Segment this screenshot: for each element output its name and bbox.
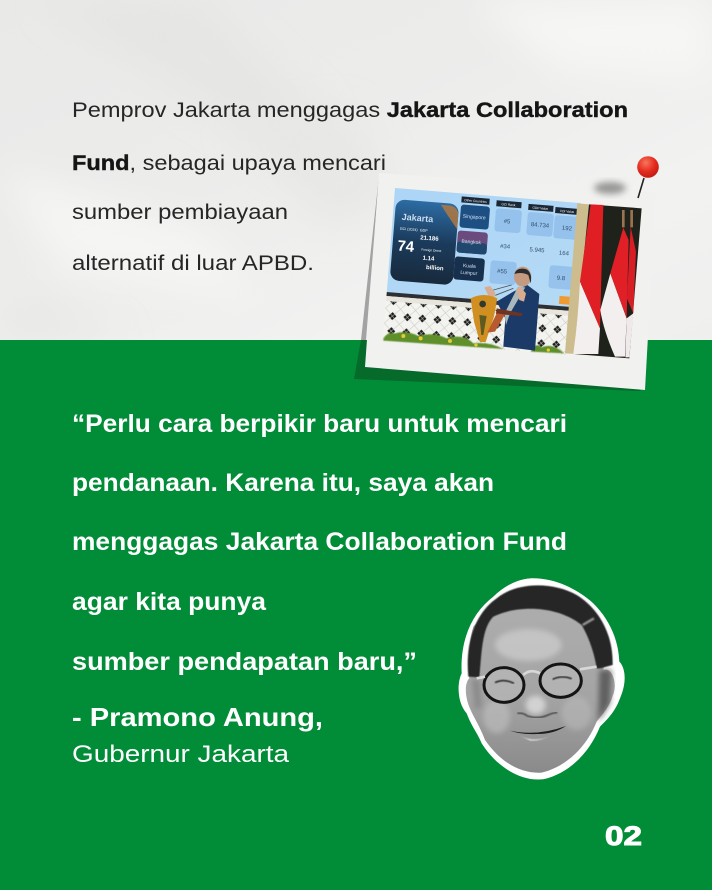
plants xyxy=(383,332,503,349)
Jakarta card: billion xyxy=(426,265,444,272)
Jakarta card xyxy=(390,199,459,285)
Jakarta card: GCI (2024) xyxy=(400,227,418,232)
city tiles: Bangkok xyxy=(461,239,482,246)
city tiles: Kuala xyxy=(463,263,476,270)
quote: sumber pendapatan baru,” xyxy=(72,648,417,676)
portrait sticker xyxy=(459,578,625,780)
intro text: Pemprov Jakarta menggagas Jakarta Collaboration xyxy=(72,99,628,122)
wall pillar xyxy=(565,203,589,354)
speaker xyxy=(484,267,539,351)
flags xyxy=(573,204,642,358)
face xyxy=(466,606,615,773)
green lower panel xyxy=(0,340,712,890)
Jakarta card: GDP xyxy=(420,228,428,233)
data cells xyxy=(489,208,581,290)
glasses xyxy=(484,664,581,702)
cheek shading xyxy=(483,700,510,733)
Jakarta card: 74 xyxy=(397,238,415,256)
lectern xyxy=(471,295,522,342)
intro text: Fund , sebagai upaya mencari xyxy=(72,152,386,175)
intro text: sumber pembiayaan xyxy=(72,201,288,224)
nose xyxy=(526,696,546,714)
column headers: FDI Value xyxy=(560,209,575,214)
intro text xyxy=(72,99,628,275)
data values: 192 xyxy=(562,226,573,233)
polaroid photo xyxy=(354,173,656,391)
attribution: - Pramono Anung, xyxy=(72,702,323,732)
data values: #5 xyxy=(503,219,511,226)
screen ledge xyxy=(386,292,573,311)
page number: 02 xyxy=(605,821,642,851)
photo foreground xyxy=(383,203,642,358)
column headers: GDP Value xyxy=(532,206,549,211)
attribution xyxy=(72,702,323,768)
Jakarta card: Foreign Direct xyxy=(421,248,442,253)
smile xyxy=(510,726,566,734)
data values: #55 xyxy=(497,269,508,276)
quote: agar kita punya xyxy=(72,588,267,616)
data values: 164 xyxy=(559,251,570,257)
lattice wall xyxy=(383,301,576,355)
Jakarta card: 1.14 xyxy=(422,256,435,263)
hair xyxy=(468,585,613,677)
map pin xyxy=(594,156,659,198)
intro text: alternatif di luar APBD. xyxy=(72,252,314,275)
city tiles: Lumpur xyxy=(460,270,478,277)
quote: menggagas Jakarta Collaboration Fund xyxy=(72,528,567,556)
Jakarta card: 21.186 xyxy=(420,235,439,243)
data values xyxy=(497,219,573,283)
polaroid shadow xyxy=(361,176,379,340)
forehead highlight xyxy=(495,629,562,661)
ear shadow xyxy=(598,670,612,722)
column headers xyxy=(461,196,581,215)
data values: 84.734 xyxy=(531,222,550,230)
quote xyxy=(72,410,567,676)
data values: #34 xyxy=(500,244,511,251)
attribution: Gubernur Jakarta xyxy=(72,741,290,768)
presentation screen xyxy=(387,188,582,307)
city tiles: Singapore xyxy=(463,214,486,221)
eyes xyxy=(495,677,572,683)
quote: pendanaan. Karena itu, saya akan xyxy=(72,469,494,497)
city tiles xyxy=(453,204,490,282)
Jakarta card: Jakarta xyxy=(401,212,435,224)
quote: “Perlu cara berpikir baru untuk mencari xyxy=(72,410,567,438)
photo xyxy=(383,188,642,360)
data values: 9.8 xyxy=(557,276,566,282)
paper background xyxy=(0,0,712,340)
polaroid frame xyxy=(365,173,656,390)
column headers: GCI Rank xyxy=(501,202,516,207)
column headers: Other Countries xyxy=(464,198,487,204)
sticker outline xyxy=(459,578,625,780)
data values: 5.945 xyxy=(529,247,545,254)
